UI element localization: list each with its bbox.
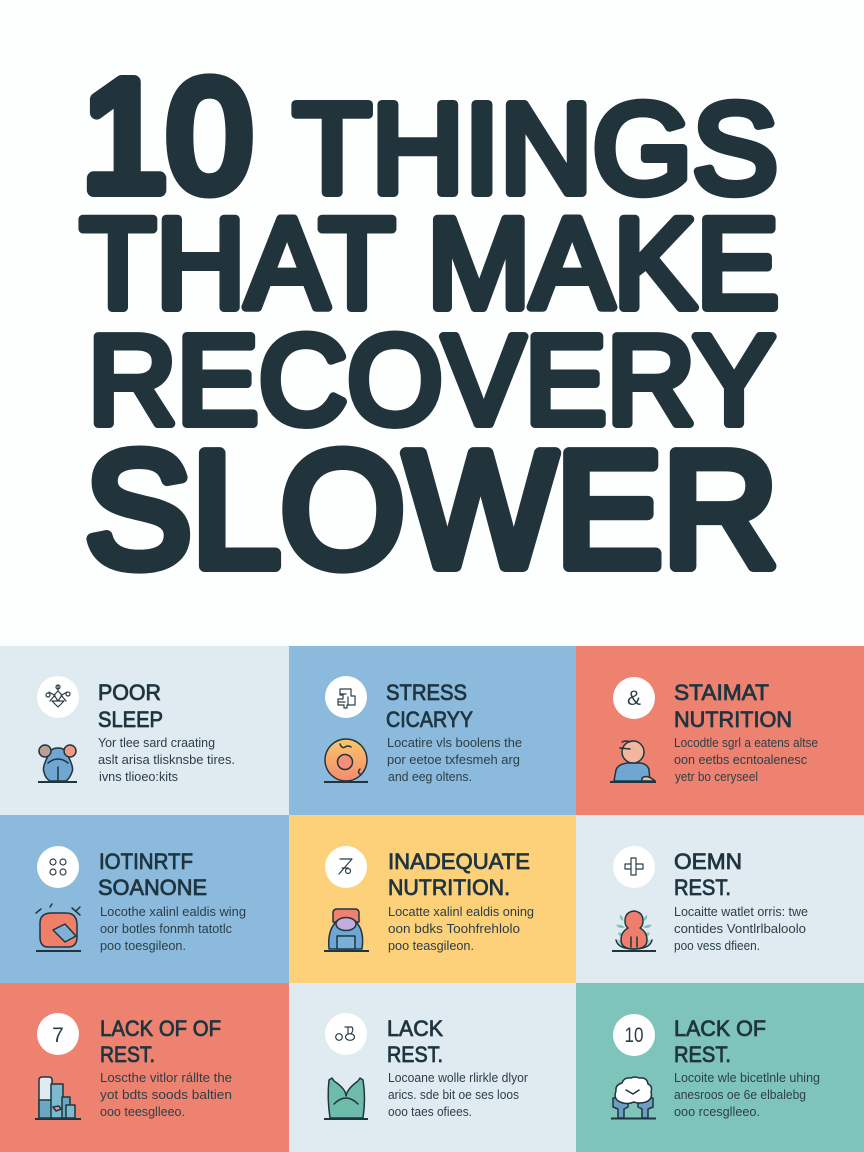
text block <box>674 736 818 784</box>
text block: aslt arisa tlisknsbe tires. <box>98 753 235 767</box>
text block: Locoite wle bicetlnle uhing <box>674 1071 820 1085</box>
illustration: person hunched <box>38 745 77 782</box>
heading: REST. <box>100 1042 155 1067</box>
heading: SLEEP <box>98 707 163 732</box>
icon: badge 4 <box>37 846 79 888</box>
text block: ivns tlioeo:kits <box>99 770 178 784</box>
icon: badge 5 <box>325 846 367 888</box>
text block: Locoane wolle rlirkle dlyor <box>388 1071 528 1085</box>
text block: Locaitte watlet orris: twe <box>674 905 808 919</box>
text block: oor botles fonmh tatotlc <box>100 922 232 936</box>
icon: badge 3 <box>613 677 655 719</box>
text block: Locatire vls boolens the <box>387 736 522 750</box>
illustration: curled figure <box>36 904 81 951</box>
illustration: stacked blocks <box>35 1077 81 1119</box>
illustration: meditating figure <box>612 911 656 951</box>
text block: contides Vontlrlbaloolo <box>674 922 806 936</box>
text block: por eetoe txfesmeh arg <box>387 753 520 767</box>
icon: badge 6 <box>613 846 655 888</box>
panel: poor sleep <box>0 646 289 815</box>
illustration: round target face <box>324 739 368 782</box>
heading: OEMN <box>674 849 742 874</box>
heading: LACK <box>387 1016 443 1041</box>
heading <box>674 1016 766 1067</box>
text block: anesroos oe 6e elbalebg <box>674 1088 806 1102</box>
heading <box>674 680 792 732</box>
text block <box>387 736 522 784</box>
heading <box>98 680 163 732</box>
heading <box>100 1016 221 1067</box>
title: RECOVERY <box>88 310 775 450</box>
heading: NUTRITION. <box>388 875 510 900</box>
illustration: cloud on legs <box>611 1077 656 1118</box>
icon: badge 10 <box>613 1014 655 1056</box>
heading <box>674 849 742 900</box>
title: 10 <box>82 49 252 224</box>
text block: oon bdks Toohfrehlolo <box>388 922 520 936</box>
text block <box>674 905 808 953</box>
text block <box>100 905 246 953</box>
title <box>80 49 779 601</box>
heading: IOTINRTF <box>99 849 193 874</box>
icon: badge 10: 10 <box>624 1024 644 1047</box>
panel: soanone <box>0 815 289 983</box>
text block <box>388 1071 528 1119</box>
illustration: backpack <box>324 909 369 951</box>
text block: poo toesgileon. <box>100 939 186 953</box>
illustration: teal bag <box>324 1078 368 1119</box>
text block: arics. sde bit oe ses loos <box>388 1088 519 1102</box>
panel: lack of rest teal <box>576 983 864 1152</box>
panel: oemn rest <box>576 815 864 983</box>
text block: poo teasgileon. <box>388 939 474 953</box>
text block: Locatte xalinl ealdis oning <box>388 905 534 919</box>
text block <box>388 905 534 953</box>
heading: REST. <box>674 875 731 900</box>
text block: ooo taes ofiees. <box>388 1105 472 1119</box>
text block: oon eetbs ecntoalenesc <box>674 753 807 767</box>
panel: nutrition coral <box>576 646 864 815</box>
title: SLOWER <box>85 418 778 601</box>
panel: inadequate nutrition <box>289 815 576 983</box>
heading: INADEQUATE <box>388 849 530 874</box>
heading: STRESS <box>386 680 467 705</box>
text block: Loscthe vitlor rállte the <box>100 1071 232 1085</box>
heading: POOR <box>98 680 161 705</box>
text block <box>674 1071 820 1119</box>
heading <box>388 849 530 900</box>
heading: NUTRITION <box>674 707 792 732</box>
icon: badge 7 <box>37 1013 79 1055</box>
text block: poo vess dfieen. <box>674 939 760 953</box>
heading: LACK OF <box>674 1016 766 1041</box>
text block: yetr bo ceryseel <box>675 770 758 784</box>
heading: REST. <box>674 1042 731 1067</box>
panel: stress <box>289 646 576 815</box>
title: THAT MAKE <box>80 192 779 336</box>
icon: badge 7: 7 <box>52 1024 64 1047</box>
heading: REST. <box>387 1042 443 1067</box>
heading: LACK OF OF <box>100 1016 221 1041</box>
icon: badge 8 <box>325 1013 367 1055</box>
icon: badge 2 <box>325 676 367 718</box>
text block: ooo rcesglleeo. <box>674 1105 760 1119</box>
text block <box>100 1071 232 1119</box>
text block: Locothe xalinl ealdis wing <box>100 905 246 919</box>
text block: Locodtle sgrl a eatens altse <box>674 736 818 750</box>
text block: ooo teesglleeo. <box>100 1105 185 1119</box>
panel: lack rest <box>289 983 576 1152</box>
illustration: seated man <box>610 741 656 782</box>
text block: yot bdts soods baltien <box>100 1088 232 1102</box>
heading: SOANONE <box>98 875 207 900</box>
text block: and eeg oltens. <box>388 770 472 784</box>
panel: lack of of rest <box>0 983 289 1152</box>
icon: badge 3: & <box>627 687 641 710</box>
heading: STAIMAT <box>674 680 769 705</box>
heading <box>98 849 207 900</box>
text block <box>98 736 235 784</box>
heading <box>386 680 473 732</box>
heading: CICARYY <box>386 707 473 732</box>
title: THINGS <box>293 78 778 220</box>
heading <box>387 1016 443 1067</box>
icon: badge 1 <box>37 676 79 718</box>
text block: Yor tlee sard craating <box>98 736 215 750</box>
